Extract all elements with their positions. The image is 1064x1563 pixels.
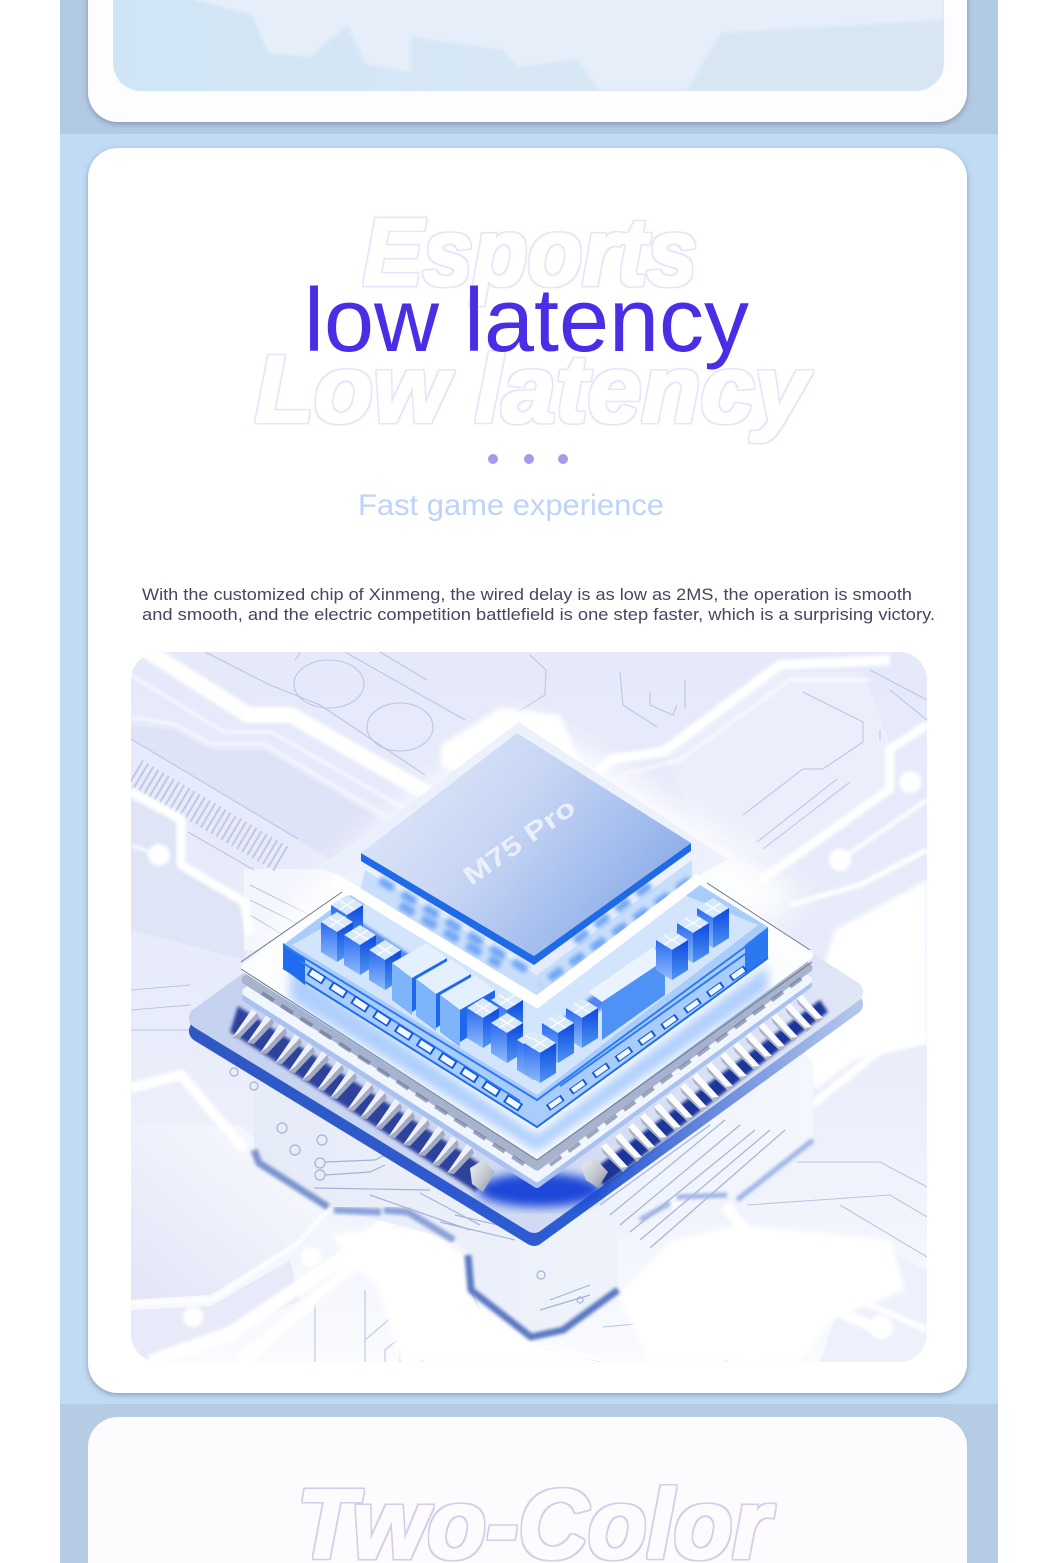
heading: low latency: low latency: [304, 271, 749, 371]
description paragraph: and smooth, and the electric competition battlefield is one step faster, which is a surprising victory.: [142, 605, 935, 624]
panel: low latency card: [88, 148, 967, 1393]
description paragraph: [142, 585, 935, 624]
deep blue channels between blocks: [335, 915, 715, 1030]
glass circuit layer: [283, 885, 768, 1152]
hatched pads: [135, 772, 283, 860]
node glows: [148, 771, 921, 1339]
outline word: Esports: Esports: [363, 199, 697, 306]
illustration: M75 Pro chip: [131, 650, 927, 1363]
chip label: M75 Pro: [457, 792, 581, 891]
small components along glass edge: [309, 971, 527, 1112]
white chevron: [333, 878, 700, 1002]
circuit blocks: [321, 895, 729, 1083]
dark glow under plate: [478, 1173, 602, 1207]
fin shadow bands: [230, 1000, 828, 1192]
left heat-sink fins: [232, 1009, 474, 1174]
glass plate: [322, 722, 727, 990]
large white lower areas: [330, 708, 927, 1362]
right heat-sink fins: [601, 994, 823, 1172]
subheading: Fast game experience: [358, 489, 664, 522]
blurred grid reflection under chip: [360, 860, 692, 998]
long bar right: [588, 947, 656, 1002]
thin circuit lines: [131, 652, 927, 1363]
top band background: [60, 0, 998, 134]
panel: two-color card: [88, 1417, 967, 1563]
white glowing traces: [131, 650, 927, 1362]
circuit background panels: [131, 786, 927, 1362]
base plate: [189, 954, 863, 1246]
top chip: [361, 733, 691, 965]
outline word: Low latency: Low latency: [255, 336, 813, 443]
long bars left: [392, 943, 447, 978]
panel: top card: [88, 0, 967, 122]
top card image: [113, 0, 944, 91]
connectors: [470, 1157, 608, 1192]
bottom band background: [60, 1404, 998, 1563]
mid plate stack: [241, 883, 812, 1184]
description paragraph: With the customized chip of Xinmeng, the wired delay is as low as 2MS, the operation is smooth: [142, 585, 912, 604]
three dots: [488, 454, 568, 464]
glow around chip stack: [264, 704, 796, 934]
printed circuit board under chip: [230, 1056, 816, 1343]
middle band background: [60, 134, 998, 1404]
